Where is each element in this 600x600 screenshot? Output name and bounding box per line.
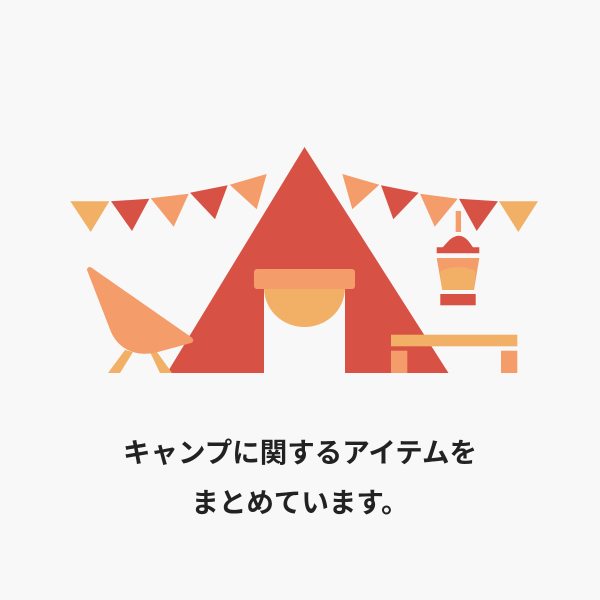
tent awning <box>254 269 355 289</box>
caption text <box>123 437 477 518</box>
tent door semicircle <box>264 289 345 327</box>
caption text: キャンプに関するアイテムを <box>123 437 477 468</box>
caption text: まとめています。 <box>191 487 409 518</box>
bunting: left <box>70 174 267 232</box>
icon: chair <box>87 267 193 373</box>
chair legs <box>108 350 172 373</box>
icon: lantern <box>437 211 479 305</box>
chair seat <box>87 267 193 354</box>
icon: table <box>391 335 517 373</box>
icon: tent <box>167 147 448 373</box>
bunting: right <box>342 174 538 232</box>
